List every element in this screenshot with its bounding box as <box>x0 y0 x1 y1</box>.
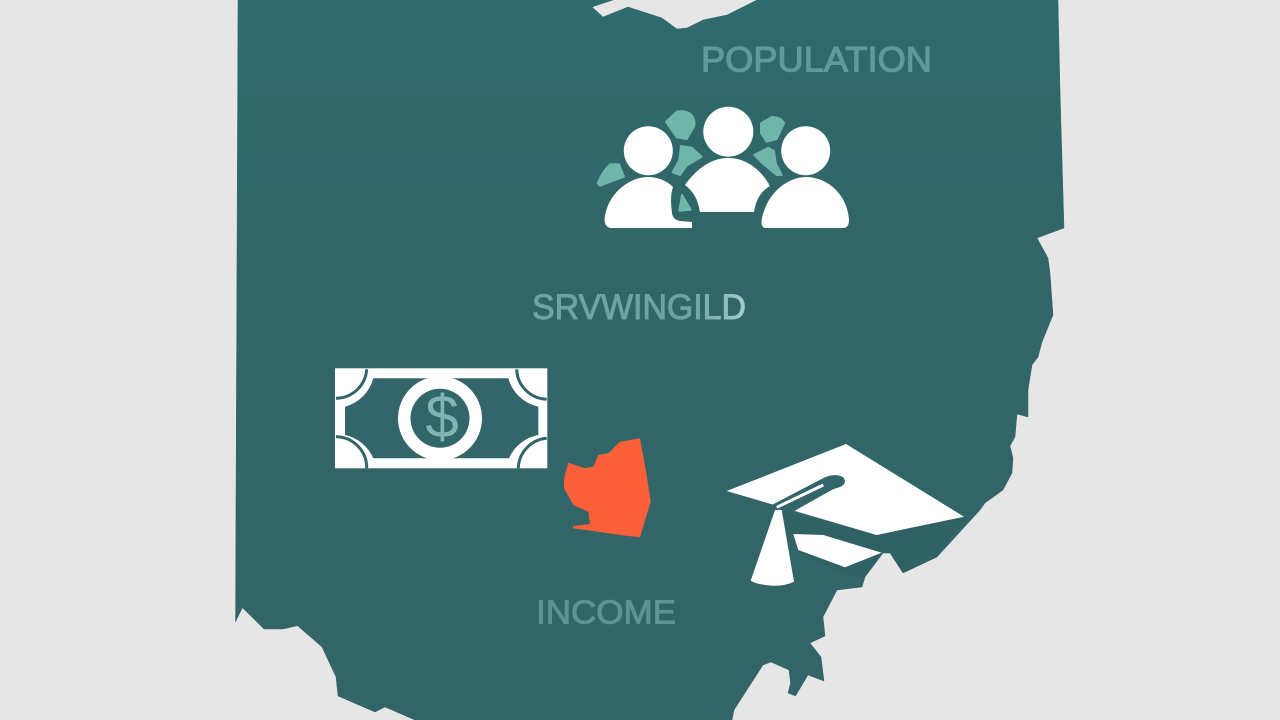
label: city name: SRVWINGILD <box>532 288 746 327</box>
icon: group of people <box>598 107 849 228</box>
icon: graduation cap <box>727 444 964 586</box>
shadow under graduation cap <box>781 511 964 577</box>
icon: dollar bill: $ <box>425 383 459 450</box>
highlighted county <box>564 438 651 537</box>
background figures <box>598 111 784 211</box>
label: income: INCOME <box>536 594 676 632</box>
label: population: POPULATION <box>701 40 932 80</box>
state map silhouette <box>236 0 1064 720</box>
icon: dollar bill <box>335 368 547 468</box>
front figures <box>605 107 849 228</box>
